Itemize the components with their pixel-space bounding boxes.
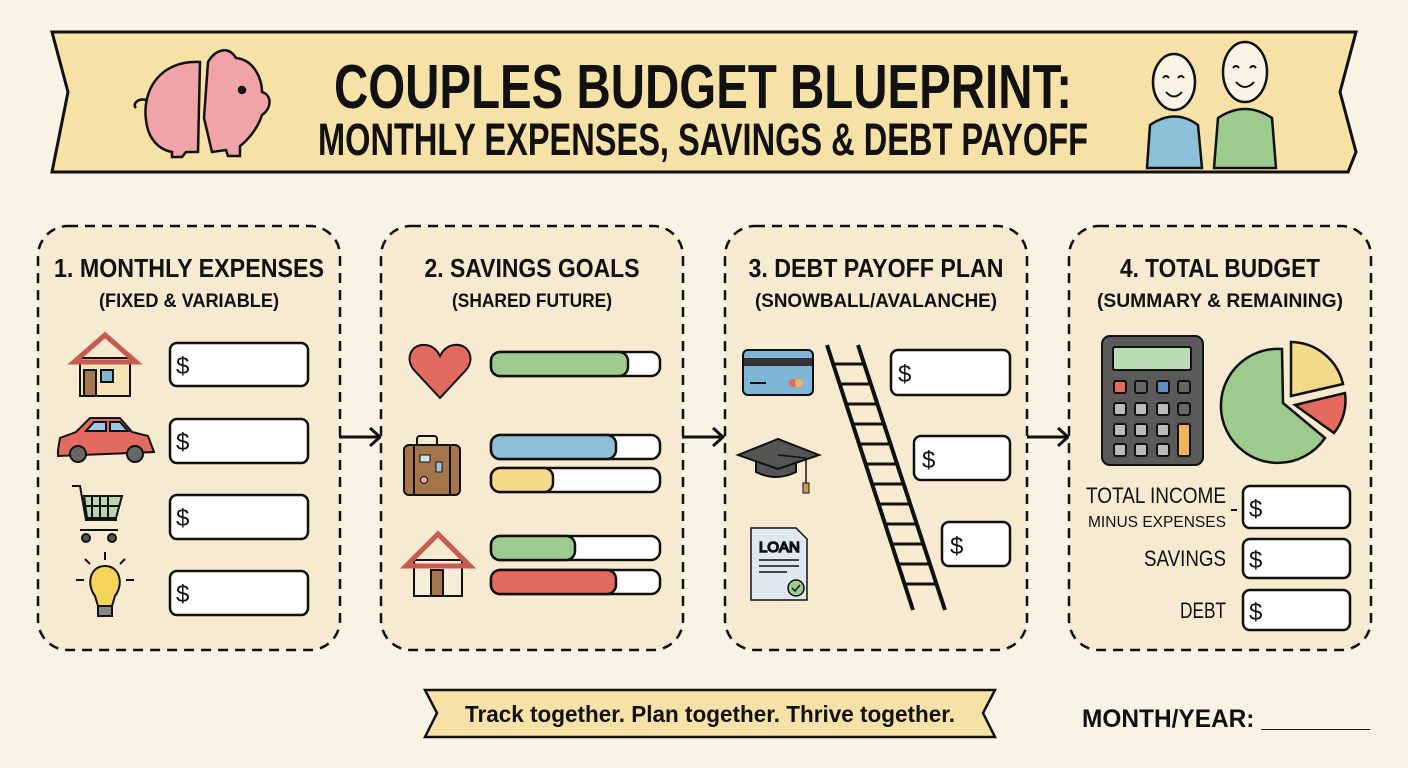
arrow 3 <box>1027 428 1068 446</box>
progress bars <box>491 352 660 594</box>
pie chart <box>1221 342 1346 463</box>
icon: house <box>74 335 136 396</box>
title banner <box>52 32 1356 172</box>
ladder <box>827 345 945 610</box>
heading: 2. SAVINGS GOALS <box>424 253 640 283</box>
icon: couple <box>1147 42 1276 168</box>
icon: loan document: LOAN <box>759 539 800 556</box>
icon: cart <box>72 486 122 542</box>
panel: total budget: SAVINGS <box>1144 546 1226 571</box>
panel: monthly expenses: $ <box>176 505 189 532</box>
arrow 2 <box>682 428 723 446</box>
arrow 1 <box>339 428 380 446</box>
subtitle: MONTHLY EXPENSES, SAVINGS & DEBT PAYOFF <box>318 114 1088 165</box>
heading: 1. MONTHLY EXPENSES <box>54 253 324 283</box>
subheading: (FIXED & VARIABLE) <box>99 291 279 312</box>
icon: calculator <box>1102 336 1203 465</box>
labels: TOTAL INCOME <box>1086 483 1226 508</box>
footer ribbon: Track together. Plan together. Thrive together. <box>465 701 955 727</box>
icon: light bulb <box>76 552 134 616</box>
month/year field: MONTH/YEAR: ________ <box>1082 705 1371 733</box>
panel: total budget: DEBT <box>1180 598 1226 623</box>
icon: loan document <box>751 528 807 600</box>
panel: debt payoff plan: $ <box>922 447 935 474</box>
icon: broken piggy bank <box>135 50 270 157</box>
panel: total budget: $ <box>1249 599 1262 626</box>
panel: total budget: MINUS EXPENSES <box>1088 514 1226 531</box>
panel: savings goals <box>381 226 683 650</box>
heading: 4. TOTAL BUDGET <box>1120 253 1320 283</box>
summary boxes <box>1243 486 1350 630</box>
panel: debt payoff plan: $ <box>898 361 911 388</box>
icon: graduation cap <box>738 439 819 493</box>
icon: suitcase <box>404 436 460 495</box>
panel: debt payoff plan: $ <box>950 533 963 560</box>
icon: house goal <box>406 534 470 596</box>
panel: total budget: $ <box>1249 496 1262 523</box>
panel: monthly expenses <box>38 226 340 650</box>
panel: debt payoff plan <box>725 226 1027 650</box>
footer ribbon <box>425 690 995 737</box>
icon: car <box>58 418 154 462</box>
subheading: (SUMMARY & REMAINING) <box>1097 291 1343 312</box>
icon: heart <box>410 345 470 398</box>
debt input boxes <box>891 350 1010 566</box>
panel: total budget: $ <box>1249 547 1262 574</box>
panel: total budget <box>1069 226 1371 650</box>
input boxes <box>170 343 308 615</box>
panel: monthly expenses: $ <box>176 429 189 456</box>
title: COUPLES BUDGET BLUEPRINT: <box>334 53 1072 122</box>
icon: credit card <box>743 350 813 395</box>
heading: 3. DEBT PAYOFF PLAN <box>748 253 1004 283</box>
panel: monthly expenses: $ <box>176 581 189 608</box>
subheading: (SHARED FUTURE) <box>452 291 612 312</box>
panel: monthly expenses: $ <box>176 353 189 380</box>
subheading: (SNOWBALL/AVALANCHE) <box>755 291 997 312</box>
